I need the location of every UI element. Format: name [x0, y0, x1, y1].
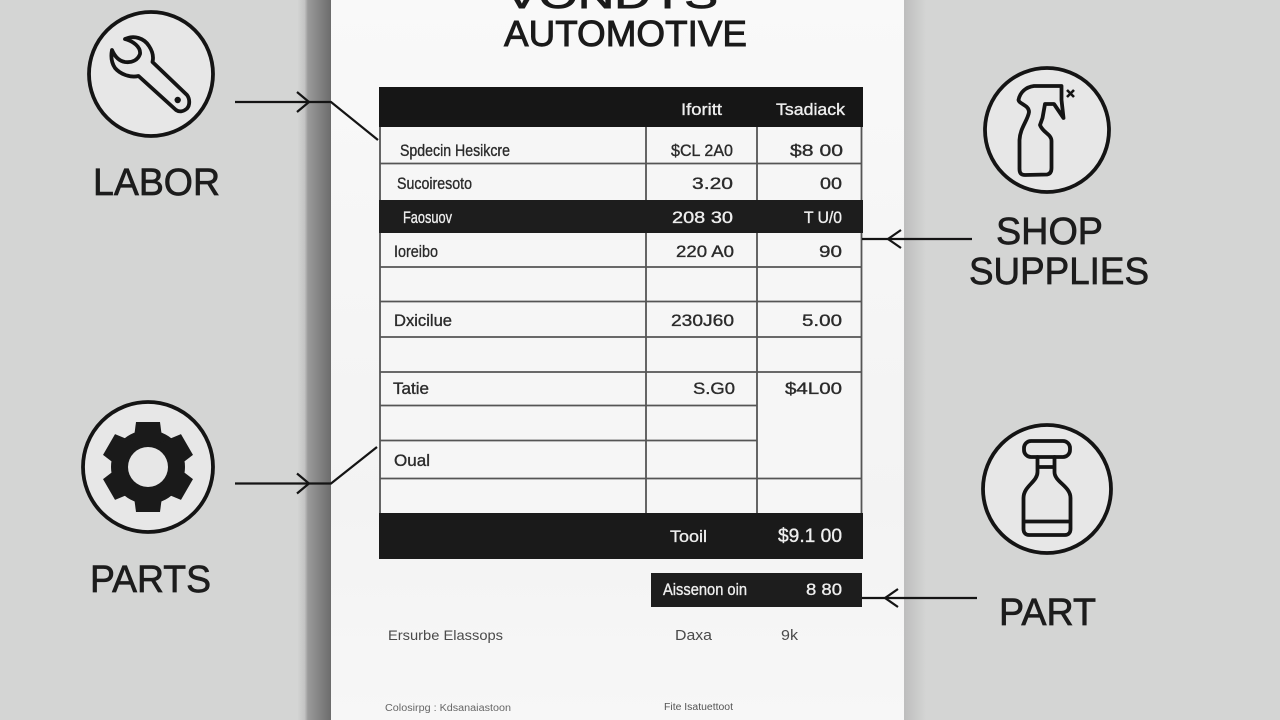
row: highlighted band: 208 30 — [672, 208, 733, 227]
callout: assessment box: Aissenon oin — [663, 580, 747, 599]
row: line item two: 00 — [820, 174, 842, 193]
row: line item three: 90 — [819, 242, 842, 261]
arrow: parts to table — [235, 447, 377, 494]
row: line item one: $8 00 — [790, 141, 843, 160]
text block: footer line: Colosirpg : Kdsanaiastoon — [385, 703, 511, 714]
panel: invoice paper — [331, 0, 904, 720]
label: parts: PARTS — [90, 559, 211, 601]
row: line item one: $CL 2A0 — [671, 141, 733, 160]
label: shop supplies: SUPPLIES — [969, 251, 1149, 293]
table header row — [379, 87, 863, 127]
label: shop supplies: SHOP — [996, 211, 1103, 253]
row: line item four: 230J60 — [671, 311, 734, 330]
row: line item four: 5.00 — [802, 311, 842, 330]
text block: notes line: Ersurbe Elassops — [388, 627, 503, 643]
row: line item three: Ioreibo — [394, 242, 438, 261]
icon: spray bottle in circle — [985, 68, 1109, 192]
invoice table — [379, 87, 863, 559]
arrow: shop supplies to table — [862, 230, 972, 248]
table header row: Tsadiack — [776, 100, 846, 119]
row: line item two: Sucoiresoto — [397, 174, 472, 193]
heading: shop name: AUTOMOTIVE — [504, 13, 747, 54]
text block: footer line — [385, 702, 733, 714]
row: line item five — [393, 379, 842, 398]
text block: notes line: Daxa — [675, 627, 713, 644]
row: line item one — [400, 141, 843, 160]
row: line item five: Tatie — [393, 379, 429, 398]
row: line item five: S.G0 — [693, 379, 735, 398]
arrow: labor to table — [235, 92, 378, 140]
row: line item four — [394, 311, 842, 330]
row: highlighted band — [379, 200, 863, 233]
row: line item three: 220 A0 — [676, 242, 734, 261]
icon: bottle in circle — [983, 425, 1111, 553]
row: total: $9.1 00 — [778, 526, 842, 547]
row: highlighted band: Faosuov — [403, 208, 452, 227]
row: line item five: $4L00 — [785, 379, 842, 398]
row: line item three — [394, 242, 842, 261]
arrow: part to assessment box — [862, 589, 977, 607]
text block: notes line: 9k — [781, 627, 799, 644]
icon: wrench in circle — [89, 12, 213, 136]
row: line item one: Spdecin Hesikcre — [400, 141, 510, 160]
text block: footer line: Fite Isatuettoot — [664, 702, 733, 713]
label: part: PART — [999, 592, 1096, 634]
row: line item four: Dxicilue — [394, 311, 452, 330]
row: line item six: Oual — [394, 451, 430, 470]
icon: gear in circle — [83, 402, 213, 532]
label: shop supplies — [969, 211, 1149, 293]
callout: assessment box — [651, 573, 862, 607]
row: line item two: 3.20 — [692, 174, 733, 193]
text block: notes line — [388, 627, 799, 644]
row: highlighted band: T U/0 — [804, 208, 842, 227]
row: total — [379, 513, 863, 559]
callout: assessment box: 8 80 — [806, 580, 842, 599]
table header row: Iforitt — [681, 100, 722, 119]
row: line item two — [397, 174, 842, 193]
label: labor: LABOR — [93, 162, 220, 204]
row: total: Tooil — [670, 527, 707, 546]
